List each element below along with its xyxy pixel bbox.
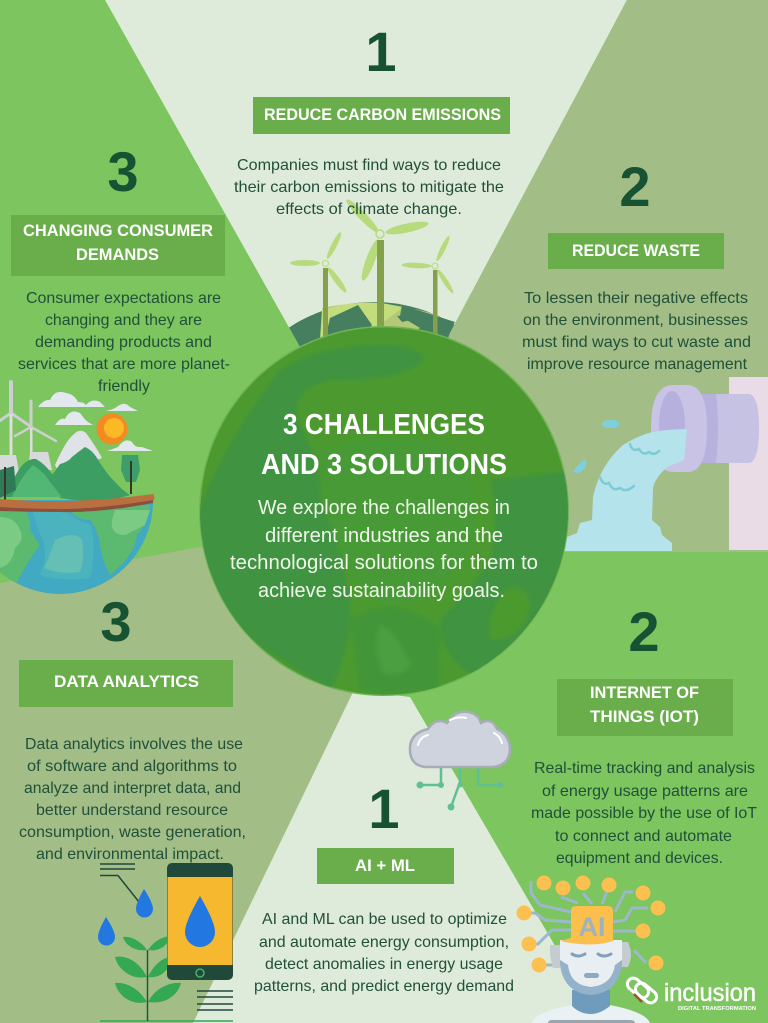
logo: inclusion: inclusion (664, 979, 756, 1007)
heading box: reduce waste: REDUCE WASTE (572, 241, 700, 260)
title: 3 CHALLENGES (283, 409, 485, 441)
text: changing consumer demands: changing and they are (45, 312, 202, 329)
text: data analytics: and environmental impact. (36, 846, 224, 863)
text: AI + ML (254, 911, 514, 995)
heading box: changing consumer demands: DEMANDS (76, 245, 159, 264)
text: AI + ML: AI and ML can be used to optimize (262, 911, 507, 928)
number 1 top: 1 (365, 20, 397, 83)
text: reduce carbon emissions (234, 157, 504, 218)
heading box: data analytics: DATA ANALYTICS (54, 672, 199, 691)
heading box: reduce carbon emissions: REDUCE CARBON EMISSIONS (264, 105, 501, 124)
text: internet of things: made possible by the use of IoT (531, 805, 757, 822)
illustration: smartphone, droplets and plant (98, 863, 233, 1021)
intro text (230, 497, 538, 602)
text: internet of things (531, 760, 757, 867)
panel: AI + ML (193, 690, 600, 1023)
text: data analytics: better understand resource (36, 802, 228, 819)
heading box: AI + ML: AI + ML (355, 856, 415, 875)
logo: inclusion: DIGITAL TRANSFORMATION (678, 1006, 756, 1012)
heading box: internet of things: THINGS (IOT) (590, 707, 699, 726)
title: AND 3 SOLUTIONS (261, 449, 507, 481)
heading box: data analytics (19, 660, 233, 707)
text: reduce carbon emissions: effects of climate change. (276, 201, 462, 218)
text: data analytics: of software and algorithms to (27, 758, 237, 775)
text: changing consumer demands: friendly (98, 378, 150, 395)
panel: reduce waste (384, 0, 768, 552)
icon: IoT cloud (410, 712, 510, 810)
heading box: reduce waste (548, 233, 724, 269)
heading box: changing consumer demands: CHANGING CONSUMER (23, 221, 213, 240)
illustration: earth with mountains and turbines (0, 382, 160, 595)
heading box: changing consumer demands (11, 215, 225, 276)
heading box: AI + ML (317, 848, 454, 884)
text: internet of things: to connect and automate (555, 828, 732, 845)
text: changing consumer demands (18, 290, 230, 395)
illustration: wind turbines on globe (289, 199, 455, 346)
intro text: technological solutions for them to (230, 552, 538, 574)
illustration: pipe pouring water (564, 385, 759, 551)
text: AI + ML: and automate energy consumption, (259, 934, 509, 951)
panel: reduce carbon emissions (105, 0, 627, 346)
logo: inclusion (625, 976, 756, 1012)
text: reduce carbon emissions: their carbon emissions to mitigate the (234, 179, 504, 196)
number 3 upper left: 3 (107, 140, 139, 203)
illustration: AI robot head: AI (578, 912, 606, 942)
text: reduce waste (522, 290, 751, 373)
text: data analytics: consumption, waste generation, (19, 824, 246, 841)
text: changing consumer demands: Consumer expectations are (26, 290, 221, 307)
text: changing consumer demands: demanding products and (35, 334, 212, 351)
text: reduce waste: on the environment, businesses (523, 312, 748, 329)
text: reduce waste: improve resource management (527, 356, 748, 373)
intro text: We explore the challenges in (258, 497, 510, 519)
wall (729, 377, 768, 550)
text: internet of things: equipment and devices. (556, 850, 723, 867)
intro text: different industries and the (265, 525, 503, 547)
heading box: reduce carbon emissions (253, 97, 510, 134)
number 1 bottom: 1 (368, 777, 400, 840)
text: data analytics (19, 736, 246, 863)
panel: data analytics (0, 511, 384, 1023)
panel: changing consumer demands (0, 140, 230, 595)
text: internet of things: Real-time tracking and analysis (534, 760, 755, 777)
number 3 lower left: 3 (100, 590, 132, 653)
illustration: AI robot head (516, 876, 666, 1023)
text: changing consumer demands: services that are more planet- (18, 356, 230, 373)
text: reduce waste: To lessen their negative effects (524, 290, 748, 307)
text: data analytics: analyze and interpret data, and (24, 780, 241, 797)
number 2 upper right: 2 (619, 155, 651, 218)
text: AI + ML: detect anomalies in energy usage (265, 956, 503, 973)
number 2 lower right: 2 (628, 600, 660, 663)
text: internet of things: of energy usage patterns are (542, 783, 748, 800)
text: reduce waste: must find ways to cut waste and (522, 334, 751, 351)
center circle: title disc (195, 326, 580, 696)
intro text: achieve sustainability goals. (258, 580, 505, 602)
heading box: internet of things: INTERNET OF (590, 683, 699, 702)
text: AI + ML: patterns, and predict energy demand (254, 978, 514, 995)
text: reduce carbon emissions: Companies must find ways to reduce (237, 157, 501, 174)
text: data analytics: Data analytics involves the use (25, 736, 243, 753)
panel: internet of things (410, 600, 757, 867)
heading box: internet of things (557, 679, 733, 736)
title (261, 409, 507, 481)
